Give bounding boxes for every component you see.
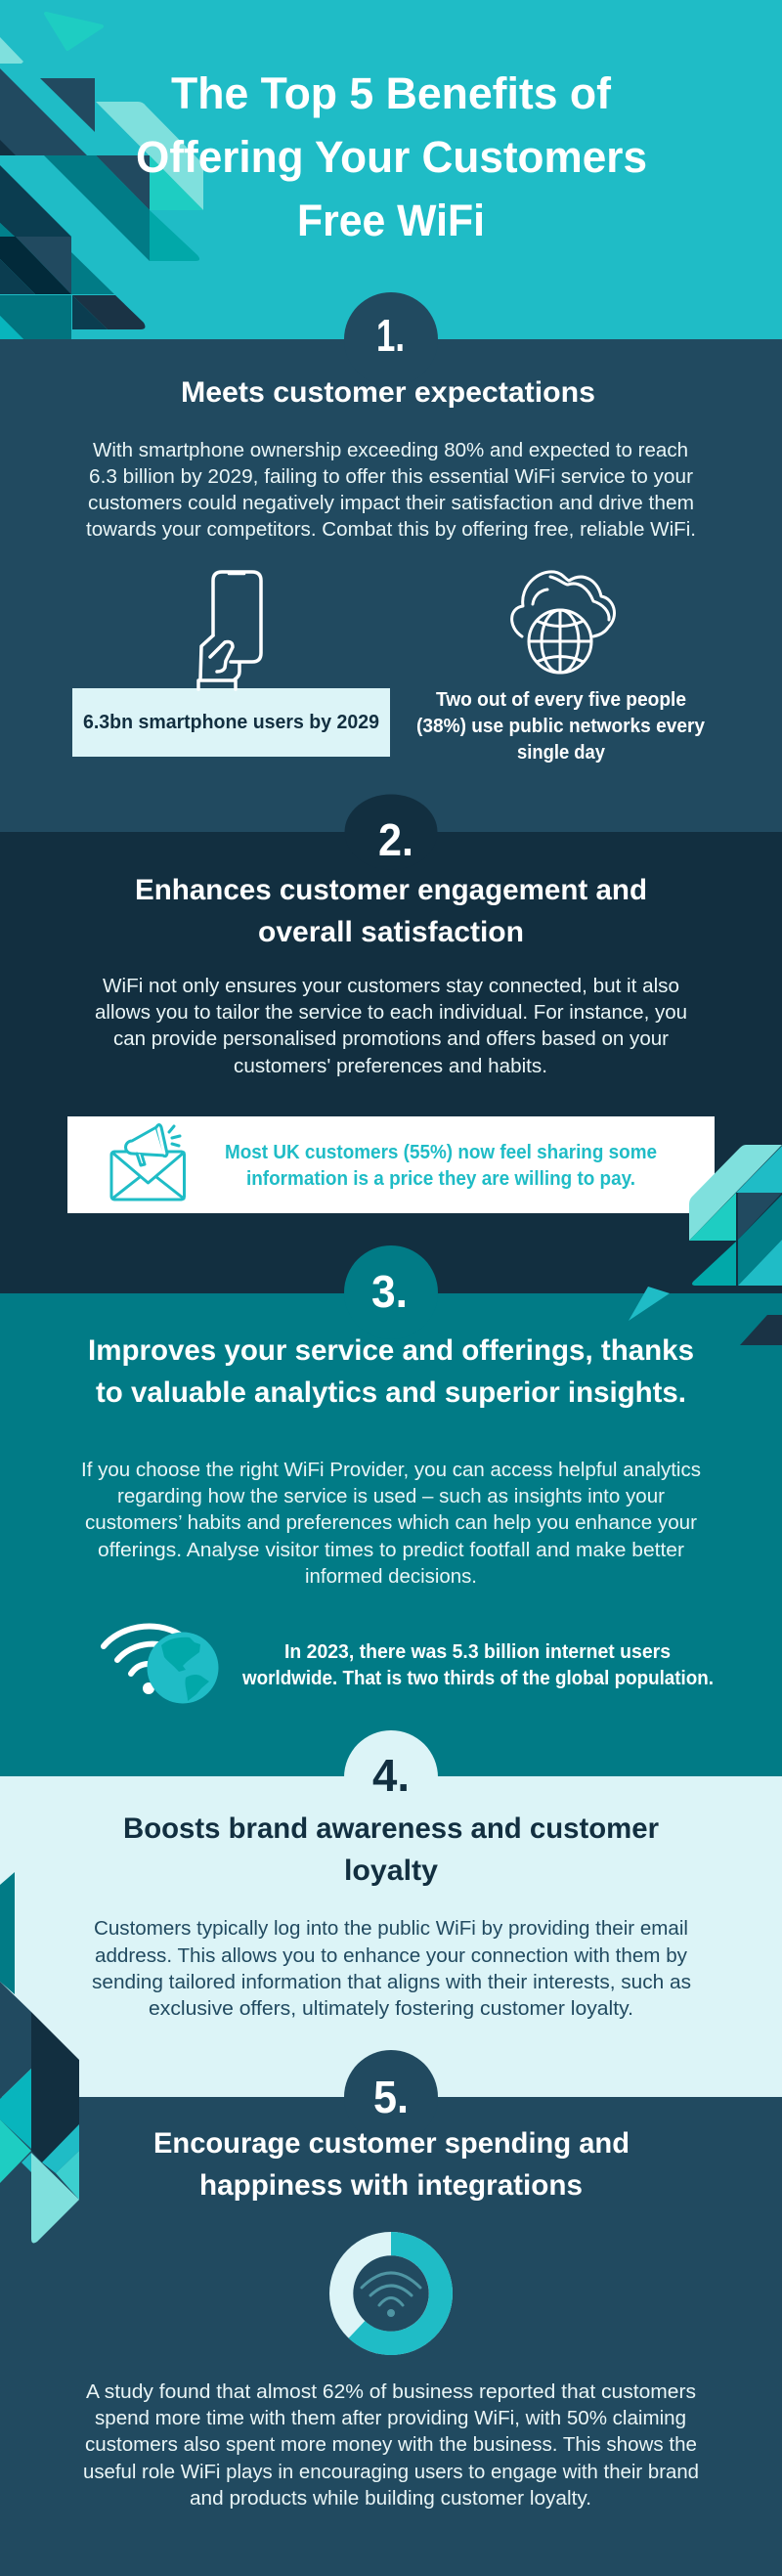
title (136, 68, 647, 245)
text block: section 5 body (83, 2380, 699, 2510)
text block: section 5 body: A study found that almost 62% of business reported that customers (86, 2380, 696, 2403)
number badge 3: 3. (371, 1266, 408, 1317)
heading: section 5 (153, 2127, 630, 2202)
text block: section 5 body: customers also spent more money with the business. This shows the (85, 2433, 697, 2456)
heading: section 2 (135, 874, 647, 948)
icon: wifi and globe (104, 1626, 219, 1703)
heading: section 3 (88, 1334, 694, 1409)
heading: section 4: Boosts brand awareness and customer (123, 1812, 659, 1845)
decoration: header geometric shapes (0, 14, 203, 339)
heading: section 2: Enhances customer engagement and (135, 874, 647, 906)
text block: section 2 body (95, 975, 687, 1077)
text block: section 2 body: allows you to tailor the service to each individual. For instance, you (95, 1001, 687, 1024)
callout: UK customers stat: Most UK customers (55%) now feel sharing some (225, 1141, 657, 1163)
number badge 4: 4. (372, 1750, 410, 1801)
text block: internet users stat: worldwide. That is two thirds of the global population. (241, 1667, 714, 1689)
text block: section 4 body: Customers typically log into the public WiFi by providing their email (94, 1917, 688, 1940)
heading: section 5: Encourage customer spending and (153, 2127, 630, 2160)
text block: internet users stat: In 2023, there was 5.3 billion internet users (284, 1640, 671, 1663)
callout: UK customers stat (67, 1116, 715, 1213)
text block: public networks stat: single day (517, 741, 606, 764)
heading: section 5: happiness with integrations (199, 2169, 583, 2202)
heading: section 3: to valuable analytics and superior insights. (96, 1376, 686, 1409)
text block: internet users stat (241, 1640, 714, 1689)
number badge 2 (344, 794, 438, 870)
text block: section 1 body: towards your competitors. Combat this by offering free, reliable WiFi. (86, 518, 696, 541)
number badge 4 (344, 1730, 438, 1824)
text block: section 3 body: If you choose the right WiFi Provider, you can access helpful analytics (81, 1459, 701, 1481)
panel: section 5 background (0, 2097, 782, 2576)
number badge 2: 2. (378, 814, 413, 865)
text block: section 3 body (81, 1459, 701, 1588)
text block: public networks stat (416, 688, 706, 764)
text block: section 3 body: regarding how the service is used – such as insights into your (117, 1485, 665, 1507)
callout: smartphone users stat: 6.3bn smartphone users by 2029 (83, 711, 379, 733)
text block: section 5 body: and products while building customer loyalty. (190, 2487, 591, 2510)
text block: section 1 body: With smartphone ownership exceeding 80% and expected to reach (93, 439, 688, 461)
decoration: right geometric shapes (629, 1145, 782, 1345)
heading: section 2: overall satisfaction (258, 916, 524, 948)
callout: UK customers stat: information is a price they are willing to pay. (246, 1167, 635, 1190)
panel: section 1 background (0, 339, 782, 832)
title: Offering Your Customers (136, 132, 647, 182)
panel: section 2 background (0, 832, 782, 1293)
icon: envelope and megaphone (111, 1124, 184, 1200)
number badge 1 (344, 292, 438, 386)
text block: section 3 body: offerings. Analyse visitor times to predict footfall and make better (98, 1539, 684, 1561)
text block: section 4 body: sending tailored information that aligns with their interests, such as (92, 1971, 691, 1993)
text block: public networks stat: (38%) use public networks every (416, 715, 706, 737)
number badge 5 (344, 2050, 438, 2144)
chart: donut with wifi icon (329, 2232, 453, 2355)
text block: section 3 body: informed decisions. (305, 1565, 477, 1588)
panel: section 3 background (0, 1293, 782, 1777)
text block: section 2 body: WiFi not only ensures your customers stay connected, but it also (103, 975, 679, 997)
text block: section 2 body: can provide personalised promotions and offers based on your (113, 1027, 669, 1050)
number badge 5: 5. (373, 2072, 409, 2122)
text block: section 1 body: customers could negatively impact their satisfaction and drive them (88, 492, 694, 514)
text block: section 2 body: customers' preferences and habits. (234, 1055, 547, 1077)
number badge 1: 1. (376, 310, 405, 361)
text block: section 4 body: address. This allows you to enhance your connection with them by (95, 1944, 688, 1967)
text block: section 1 body (86, 439, 696, 541)
icon: hand holding phone (198, 572, 261, 689)
text block: section 5 body: useful role WiFi plays in encouraging users to engage with their brand (83, 2461, 699, 2483)
decoration: left geometric shapes (0, 1872, 79, 2243)
panel: header background (0, 0, 782, 340)
heading: section 4 (123, 1812, 659, 1887)
text block: section 5 body: spend more time with them after providing WiFi, with 50% claiming (95, 2407, 686, 2429)
callout: smartphone users stat (72, 688, 390, 757)
title: Free WiFi (297, 196, 485, 245)
text block: section 1 body: 6.3 billion by 2029, failing to offer this essential WiFi service to your (89, 465, 693, 488)
title: The Top 5 Benefits of (171, 68, 612, 118)
text block: section 3 body: customers’ habits and preferences which can help you enhance your (85, 1511, 697, 1534)
heading: section 3: Improves your service and offerings, thanks (88, 1334, 694, 1367)
heading: section 1: Meets customer expectations (181, 376, 595, 409)
heading: section 4: loyalty (344, 1855, 438, 1887)
text block: section 4 body (92, 1917, 691, 2020)
icon: cloud and globe (512, 572, 614, 673)
text block: public networks stat: Two out of every five people (436, 688, 686, 711)
number badge 3 (344, 1245, 438, 1339)
text block: section 4 body: exclusive offers, ultimately fostering customer loyalty. (149, 1997, 633, 2020)
panel: section 4 background (0, 1776, 782, 2097)
